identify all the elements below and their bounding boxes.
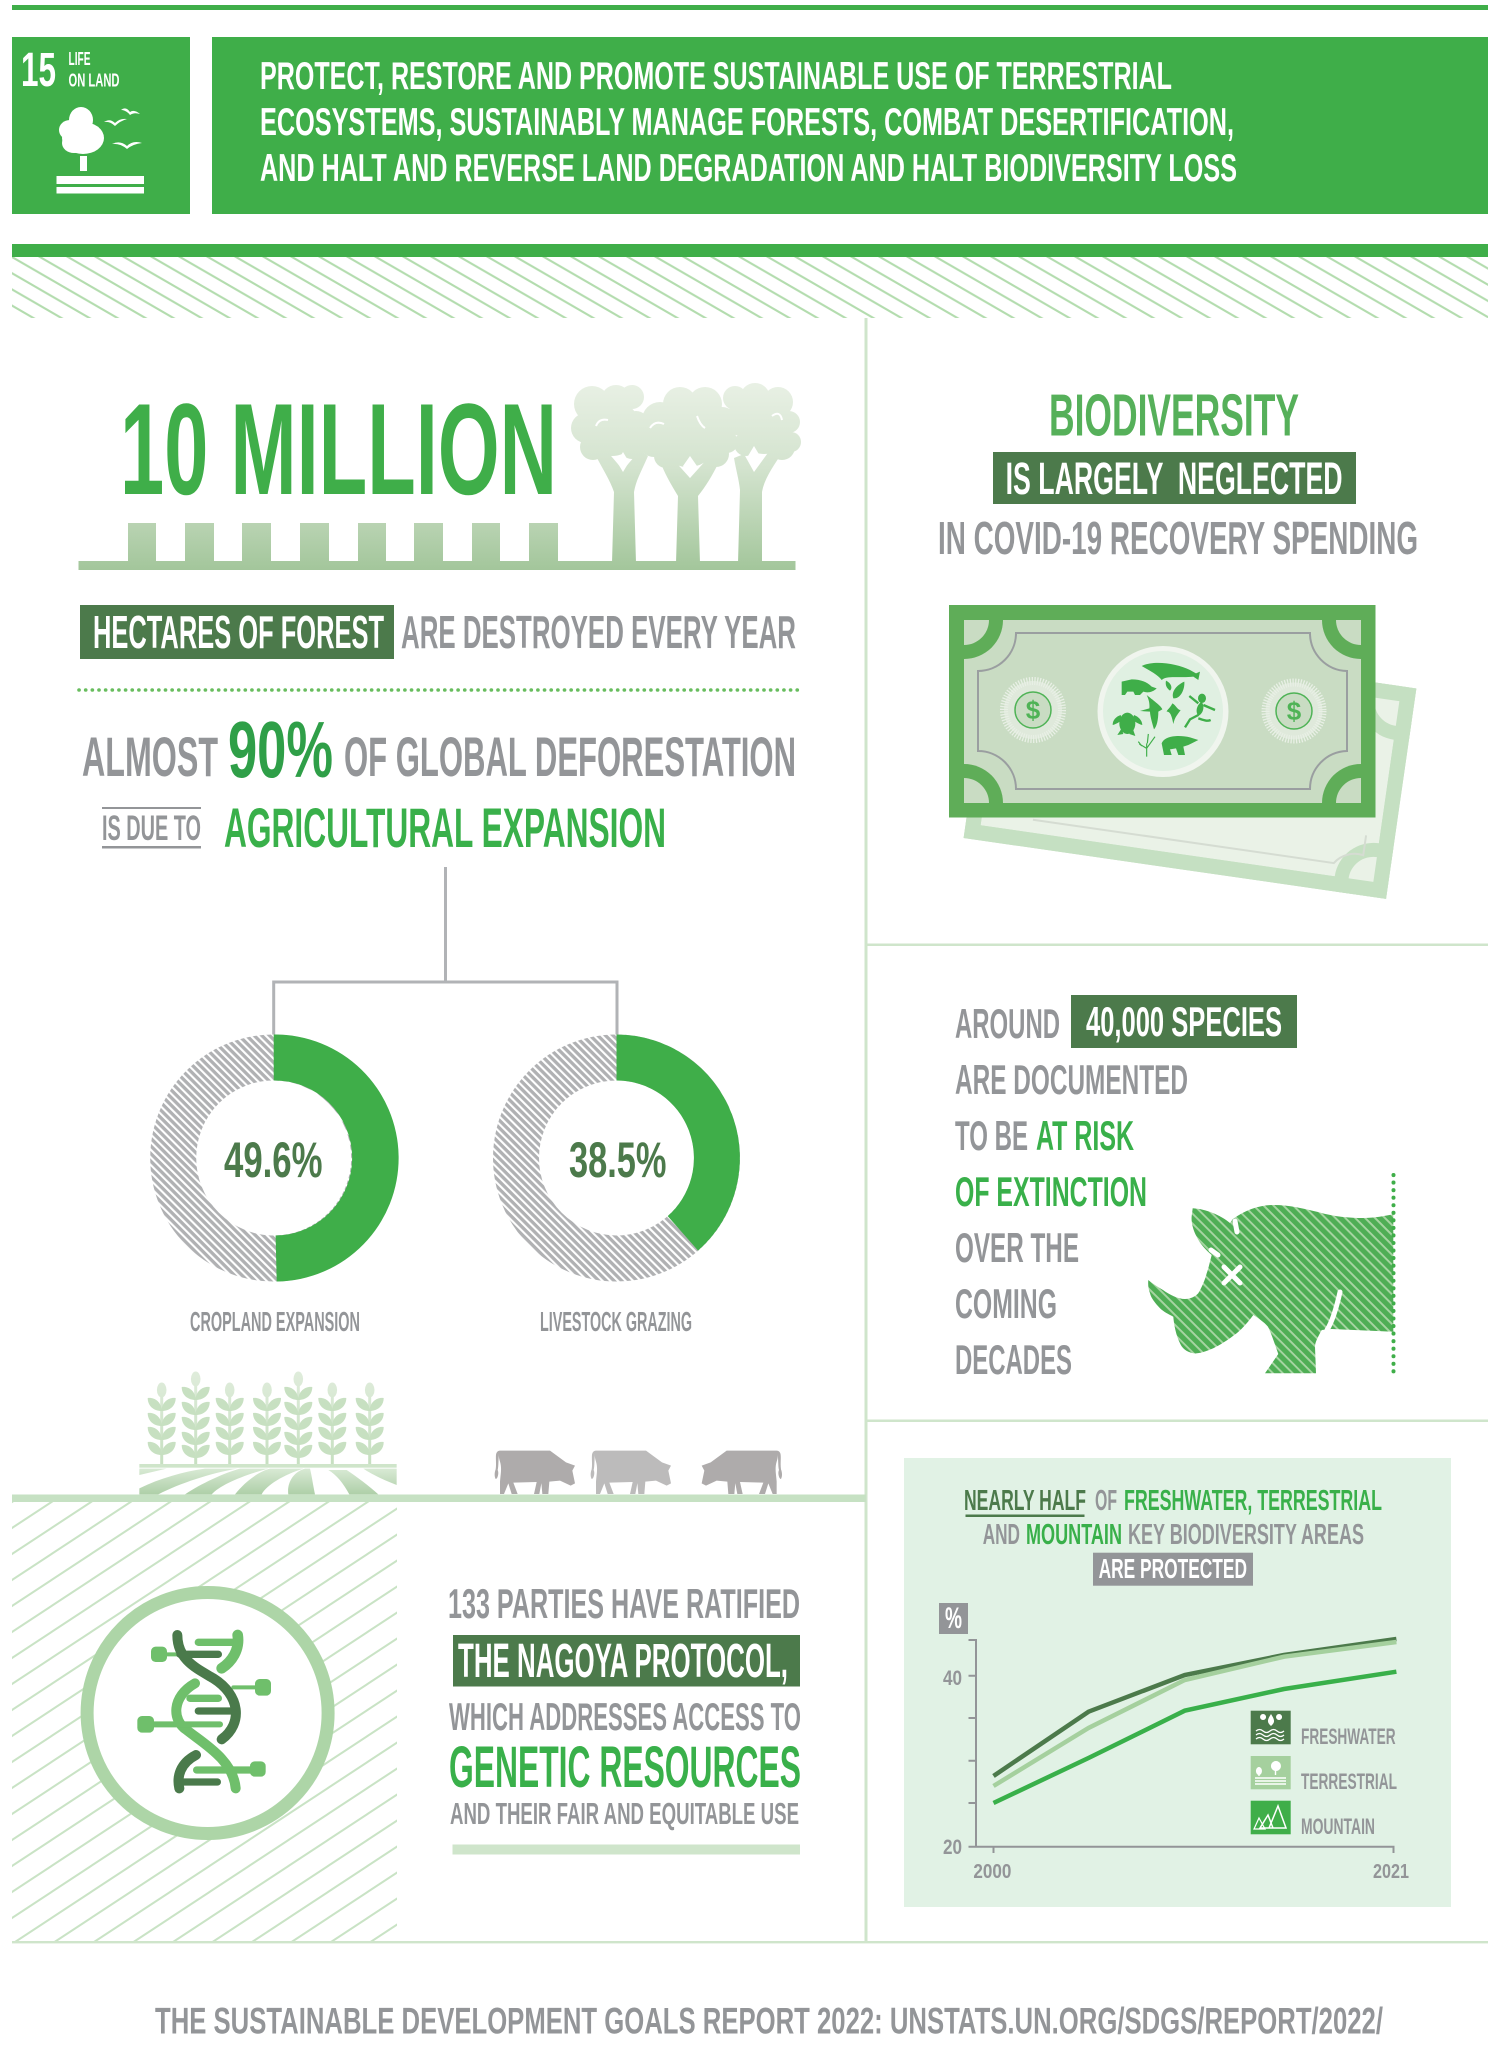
bill corner ornaments (964, 620, 1361, 803)
chart axes (968, 1640, 1394, 1853)
donut chart: cropland expansion: CROPLAND EXPANSION (190, 1306, 360, 1337)
headline: 10 million: 10 MILLION (120, 376, 557, 522)
chart heading: AND (983, 1519, 1020, 1551)
statement: almost 90%: ALMOST (82, 725, 218, 788)
text block: Nagoya protocol: GENETIC RESOURCES (449, 1735, 801, 1800)
chart heading: ARE PROTECTED (1099, 1553, 1247, 1584)
text block: Nagoya protocol: THE NAGOYA PROTOCOL, (458, 1635, 788, 1688)
text block: species at risk (955, 995, 1297, 1383)
donut chart: livestock grazing: LIVESTOCK GRAZING (540, 1306, 692, 1337)
icon: rear banknote (964, 682, 1416, 899)
chart heading (964, 1485, 1382, 1586)
legend: freshwater: FRESHWATER (1301, 1724, 1396, 1749)
legend: terrestrial: TERRESTRIAL (1301, 1769, 1397, 1794)
text block: species at risk: DECADES (955, 1336, 1072, 1383)
heading: biodiversity neglected (938, 382, 1418, 564)
text block: species at risk: 40,000 SPECIES (1086, 998, 1282, 1045)
right dollar medallion (1266, 682, 1322, 740)
statement: almost 90%: OF GLOBAL DEFORESTATION (344, 725, 796, 788)
icon: front banknote (949, 605, 1376, 818)
y axis unit: % (945, 1602, 962, 1635)
axis labels (943, 1667, 1409, 1883)
donut chart: cropland expansion: 49.6% (224, 1132, 322, 1188)
left dollar medallion: $ (1026, 695, 1041, 725)
left dollar medallion (1004, 681, 1062, 739)
legend: mountain (1251, 1801, 1375, 1839)
hectares statement: ARE DESTROYED EVERY YEAR (401, 606, 796, 658)
text block: species at risk: ARE DOCUMENTED (955, 1056, 1188, 1103)
statement: due to agricultural expansion (102, 796, 666, 859)
top green rule (12, 5, 1488, 10)
text block: species at risk: AT RISK (1036, 1112, 1134, 1159)
heading: biodiversity neglected: BIODIVERSITY (1049, 382, 1299, 448)
text block: species at risk: OVER THE (955, 1224, 1079, 1271)
text block: species at risk: TO BE (955, 1112, 1028, 1159)
donut chart: livestock grazing: 38.5% (569, 1132, 666, 1188)
icon: DNA in circle (87, 1592, 328, 1834)
central species medallion (1098, 646, 1228, 777)
goal name: ON LAND (68, 70, 120, 90)
text block: species at risk: AROUND (955, 1000, 1060, 1047)
axis labels: 2021 (1373, 1861, 1409, 1883)
icon: rhino (1148, 1205, 1393, 1373)
line: terrestrial (994, 1642, 1396, 1786)
text block: Nagoya protocol: WHICH ADDRESSES ACCESS TO (449, 1696, 801, 1739)
chart heading: OF (1095, 1485, 1117, 1517)
text block: species at risk: COMING (955, 1280, 1057, 1327)
statement: due to agricultural expansion: AGRICULTURAL EXPANSION (224, 796, 666, 859)
statement: due to agricultural expansion: IS DUE TO (102, 809, 201, 848)
goal number: 15 (21, 44, 56, 97)
axis labels: 20 (943, 1836, 962, 1859)
title banner (212, 37, 1488, 214)
icon: forest with stumps (78, 383, 801, 570)
text block: Nagoya protocol (448, 1580, 801, 1854)
chart heading: MOUNTAIN (1026, 1519, 1122, 1551)
statement: almost 90% (82, 705, 796, 794)
connector (274, 867, 617, 1035)
hectares statement: HECTARES OF FOREST (93, 606, 384, 658)
axis labels: 2000 (973, 1861, 1011, 1883)
chart heading: NEARLY HALF (964, 1485, 1086, 1517)
text block: species at risk: OF EXTINCTION (955, 1168, 1147, 1215)
icon: wheat field (139, 1372, 397, 1494)
text block: Nagoya protocol: 133 PARTIES HAVE RATIFIED (448, 1580, 800, 1627)
icon: tree and birds (56, 107, 144, 194)
legend: mountain: MOUNTAIN (1301, 1814, 1375, 1839)
donut chart: cropland expansion (173, 1034, 399, 1337)
legend: terrestrial (1251, 1756, 1397, 1794)
icon: cows (495, 1451, 782, 1494)
right dollar medallion: $ (1287, 696, 1302, 726)
legend: freshwater (1251, 1711, 1396, 1749)
axis labels: 40 (943, 1667, 962, 1690)
goal name (68, 49, 120, 90)
panel: protected areas chart (904, 1458, 1451, 1907)
SDG 15 badge (12, 37, 190, 214)
donut chart: livestock grazing (516, 1034, 740, 1337)
text block: Nagoya protocol: AND THEIR FAIR AND EQUITABLE USE (450, 1796, 799, 1831)
statement: almost 90%: 90% (228, 705, 333, 794)
line: mountain (994, 1672, 1396, 1803)
line: freshwater (994, 1639, 1396, 1776)
goal name: LIFE (68, 49, 90, 69)
chart heading: KEY BIODIVERSITY AREAS (1128, 1519, 1364, 1551)
